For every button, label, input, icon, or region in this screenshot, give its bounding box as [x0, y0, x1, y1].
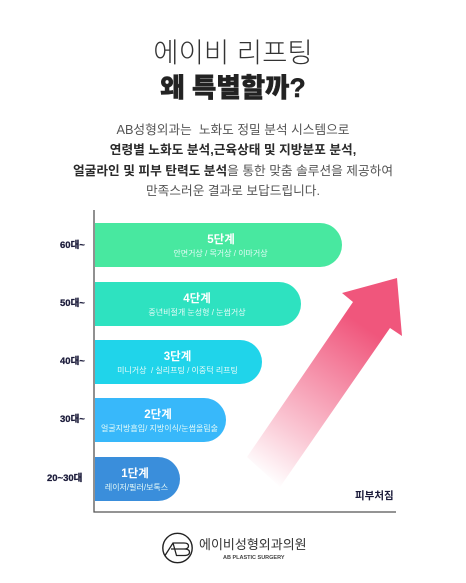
- stage 4 bar: 중년비절개 눈성형 / 눈썹거상: [148, 308, 246, 317]
- title: second line: 왜 특별할까?: [160, 73, 306, 103]
- logo mark: [162, 532, 193, 564]
- stage 2 bar: [95, 398, 226, 442]
- stage 3 bar: 미니거상 / 실리프팅 / 이중턱 리프팅: [117, 366, 238, 375]
- logo english name: AB PLASTIC SURGERY: [223, 555, 285, 561]
- stage 3 bar: 3단계: [164, 351, 191, 363]
- stage 5 bar: 안면거상 / 목거상 / 이마거상: [173, 249, 268, 258]
- stage 2 bar: 2단계: [144, 409, 172, 421]
- stage 4 bar: [95, 282, 301, 326]
- intro text block: 연령별 노화도 분석,근육상태 및 지방분포 분석,: [110, 143, 356, 157]
- intro text block: 만족스러운 결과로 보답드립니다.: [146, 184, 320, 198]
- stage 3 bar: [95, 340, 262, 384]
- chart axes: [93, 210, 396, 513]
- age label 50s: 50대~: [60, 298, 85, 309]
- logo: [162, 532, 307, 564]
- stage 5 bar: [95, 223, 342, 267]
- age label 30s: 30대~: [60, 414, 85, 425]
- intro text block: [73, 123, 393, 198]
- stage 4 bar: 4단계: [183, 293, 211, 305]
- stage 5 bar: 5단계: [207, 234, 235, 246]
- logo korean name: 에이비성형외과의원: [199, 537, 307, 552]
- age label 20-30s: 20~30대: [47, 473, 82, 484]
- arrow: rising pink gradient: [248, 278, 402, 481]
- age label 60s: 60대~: [60, 240, 85, 251]
- title: first line: 에이비 리프팅: [153, 37, 313, 68]
- age label 40s: 40대~: [60, 356, 85, 367]
- intro text block: AB성형외과는 노화도 정밀 분석 시스템으로: [116, 123, 349, 137]
- stage 1 bar: 레이저/필러/보톡스: [105, 483, 168, 492]
- stage 2 bar: 얼굴지방흡입/ 지방이식/눈썹올림술: [101, 424, 218, 433]
- stage 1 bar: [95, 457, 180, 501]
- axis label: skin sagging: 피부처짐: [355, 490, 394, 502]
- intro text block: 얼굴라인 및 피부 탄력도 분석을 통한 맞춤 솔루션을 제공하여: [73, 164, 393, 178]
- stage 1 bar: 1단계: [121, 468, 149, 480]
- chart: skin sagging stages: [47, 210, 402, 513]
